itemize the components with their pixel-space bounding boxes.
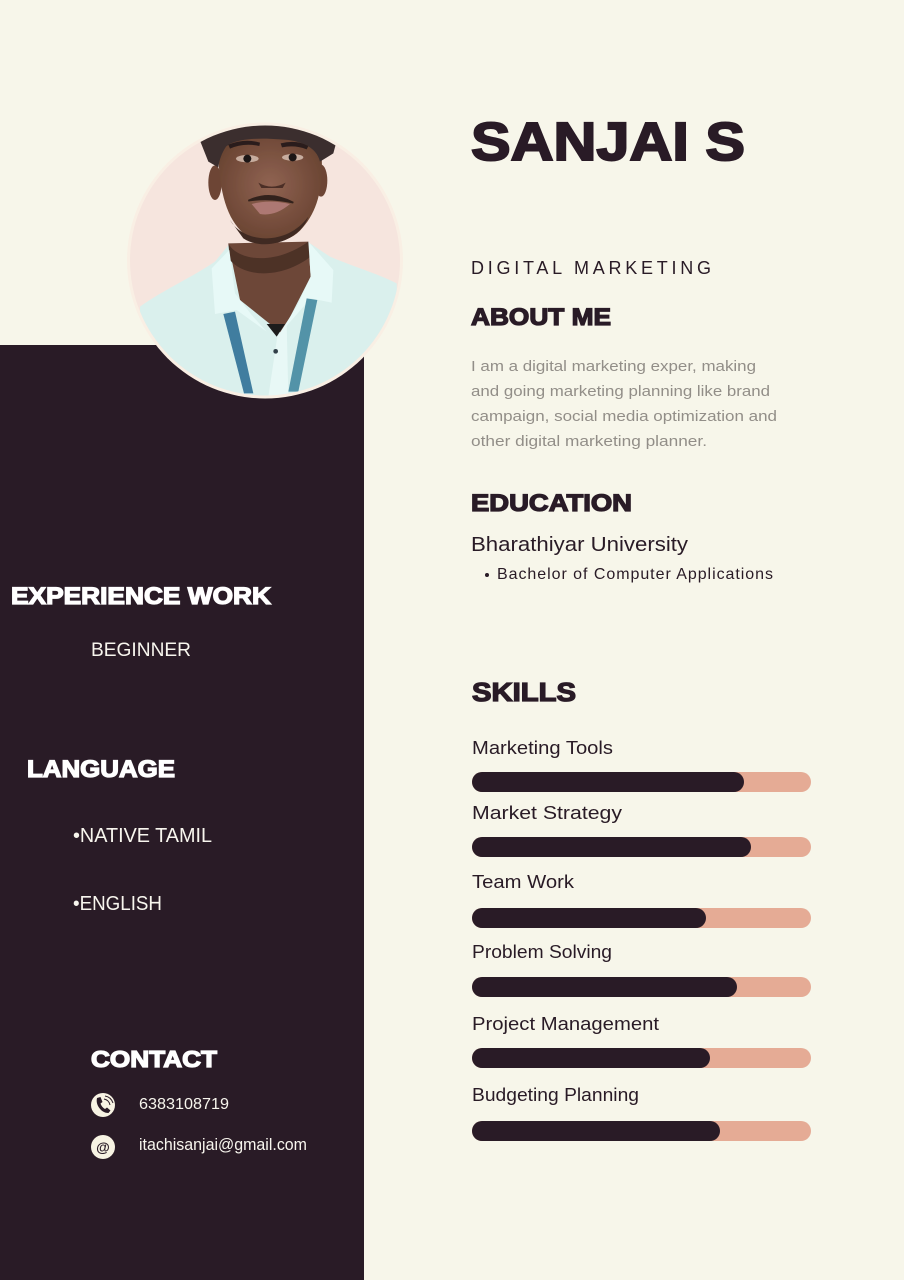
experience level: BEGINNER bbox=[91, 640, 191, 661]
education details: Bachelor of Computer Applications bbox=[497, 566, 773, 583]
skill: market strategy: Market Strategy bbox=[472, 802, 623, 823]
job title: DIGITAL MARKETING bbox=[471, 258, 711, 278]
phone number: 6383108719 bbox=[139, 1096, 229, 1113]
skill: team work: Team Work bbox=[472, 871, 575, 892]
skill: budgeting planning bbox=[472, 1084, 811, 1141]
heading: contact: CONTACT bbox=[91, 1046, 217, 1072]
text block: about me: campaign, social media optimization and bbox=[471, 408, 777, 425]
profile photo bbox=[125, 120, 405, 410]
skill: marketing tools bbox=[472, 737, 811, 792]
text block: about me bbox=[471, 358, 777, 450]
skill: marketing tools: Marketing Tools bbox=[472, 737, 613, 758]
skill: team work bbox=[472, 871, 811, 928]
skill: market strategy bbox=[472, 802, 811, 857]
language: english: •ENGLISH bbox=[73, 893, 162, 915]
skill: project management: Project Management bbox=[472, 1013, 659, 1034]
language: native tamil: •NATIVE TAMIL bbox=[73, 825, 212, 847]
email address: itachisanjai@gmail.com bbox=[139, 1136, 307, 1154]
heading: skills: SKILLS bbox=[472, 677, 576, 707]
heading: experience work: EXPERIENCE WORK bbox=[11, 583, 272, 610]
panel: left sidebar bbox=[0, 345, 364, 1280]
skill: problem solving: Problem Solving bbox=[472, 941, 612, 962]
icon: phone bbox=[91, 1093, 115, 1117]
icon: email bbox=[91, 1135, 115, 1159]
education details: Bharathiyar University bbox=[471, 534, 688, 556]
icon: email: @ bbox=[96, 1139, 110, 1155]
skill: budgeting planning: Budgeting Planning bbox=[472, 1084, 639, 1105]
text block: about me: I am a digital marketing exper, making bbox=[471, 358, 756, 375]
heading: language: LANGUAGE bbox=[27, 756, 175, 783]
skill: problem solving bbox=[472, 941, 811, 997]
skill: project management bbox=[472, 1013, 811, 1068]
text block: about me: and going marketing planning like brand bbox=[471, 383, 770, 400]
heading: education: EDUCATION bbox=[471, 490, 632, 517]
name heading: SANJAI S bbox=[471, 112, 745, 172]
heading: about me: ABOUT ME bbox=[471, 304, 611, 331]
text block: about me: other digital marketing planner. bbox=[471, 433, 707, 450]
education details bbox=[471, 534, 773, 583]
